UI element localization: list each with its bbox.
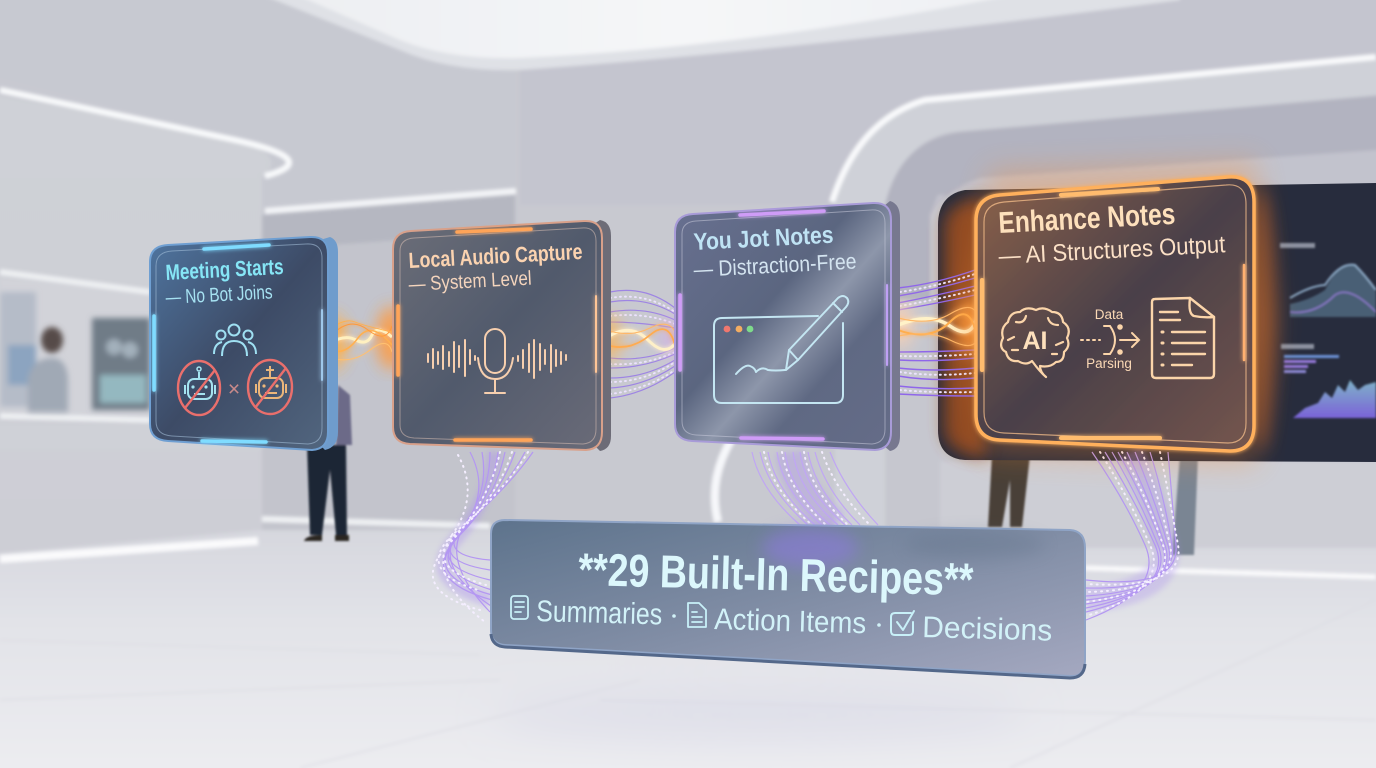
accent bars (154, 245, 322, 442)
panel: meeting starts (150, 237, 338, 450)
icon: people (214, 324, 256, 356)
icon: decisions (891, 611, 914, 635)
icon: document (1152, 298, 1214, 378)
icon: action items (688, 603, 706, 627)
connector: notes card to recipes fiber bundle (752, 452, 878, 525)
connector: audio to notes data stream (595, 290, 682, 398)
connector: meeting to audio lightning (320, 308, 406, 368)
icon: parsing arrow (1081, 325, 1139, 354)
heading: meeting starts: Meeting Starts (165, 254, 284, 285)
separator dot (877, 623, 881, 627)
heading: you jot notes: You Jot Notes (693, 222, 834, 256)
subheading: system level: — System Level (408, 268, 532, 296)
panel: you jot notes (675, 201, 900, 451)
label: parsing: Parsing (1086, 356, 1132, 371)
icon: ai brain: AI (1022, 327, 1048, 355)
icon: microphone with waveform (428, 329, 566, 393)
heading: local audio capture: Local Audio Capture (408, 239, 583, 273)
background people (304, 385, 1198, 555)
text: action items: Action Items (714, 603, 867, 640)
left window with blurred screens and person (0, 292, 150, 412)
icon: no bot left (178, 361, 220, 415)
dark dashboard screen (938, 183, 1376, 462)
text: decisions: Decisions (922, 611, 1053, 648)
accent bars (982, 189, 1244, 438)
icon: ai brain (1001, 308, 1069, 377)
subheading: ai structures output: — AI Structures Output (998, 231, 1226, 270)
connector: enhance card to recipes fiber bundle (1086, 452, 1179, 620)
panel: 29 built-in recipes (491, 520, 1085, 678)
panel: local audio capture (393, 220, 611, 451)
separator dot (672, 614, 676, 618)
heading: 29 built-in recipes: **29 Built-In Recipes** (578, 543, 974, 605)
label: data: Data (1095, 307, 1124, 322)
subheading: distraction-free: — Distraction-Free (693, 248, 857, 282)
icon: cross: × (228, 378, 240, 401)
accent bars (680, 211, 887, 439)
connector: audio card to recipes fiber bundle (433, 452, 533, 622)
ceiling (200, 0, 1180, 70)
icon: no bot right (248, 360, 292, 414)
accent bars (398, 229, 596, 440)
heading: enhance notes: Enhance Notes (998, 198, 1176, 240)
connector: notes to enhance data stream (886, 270, 988, 396)
icon: note window with pen (714, 296, 848, 403)
text: summaries: Summaries (536, 595, 663, 632)
subheading: no bot joins: — No Bot Joins (165, 281, 273, 309)
panel: enhance notes (960, 160, 1275, 465)
icon: summaries (511, 596, 528, 619)
